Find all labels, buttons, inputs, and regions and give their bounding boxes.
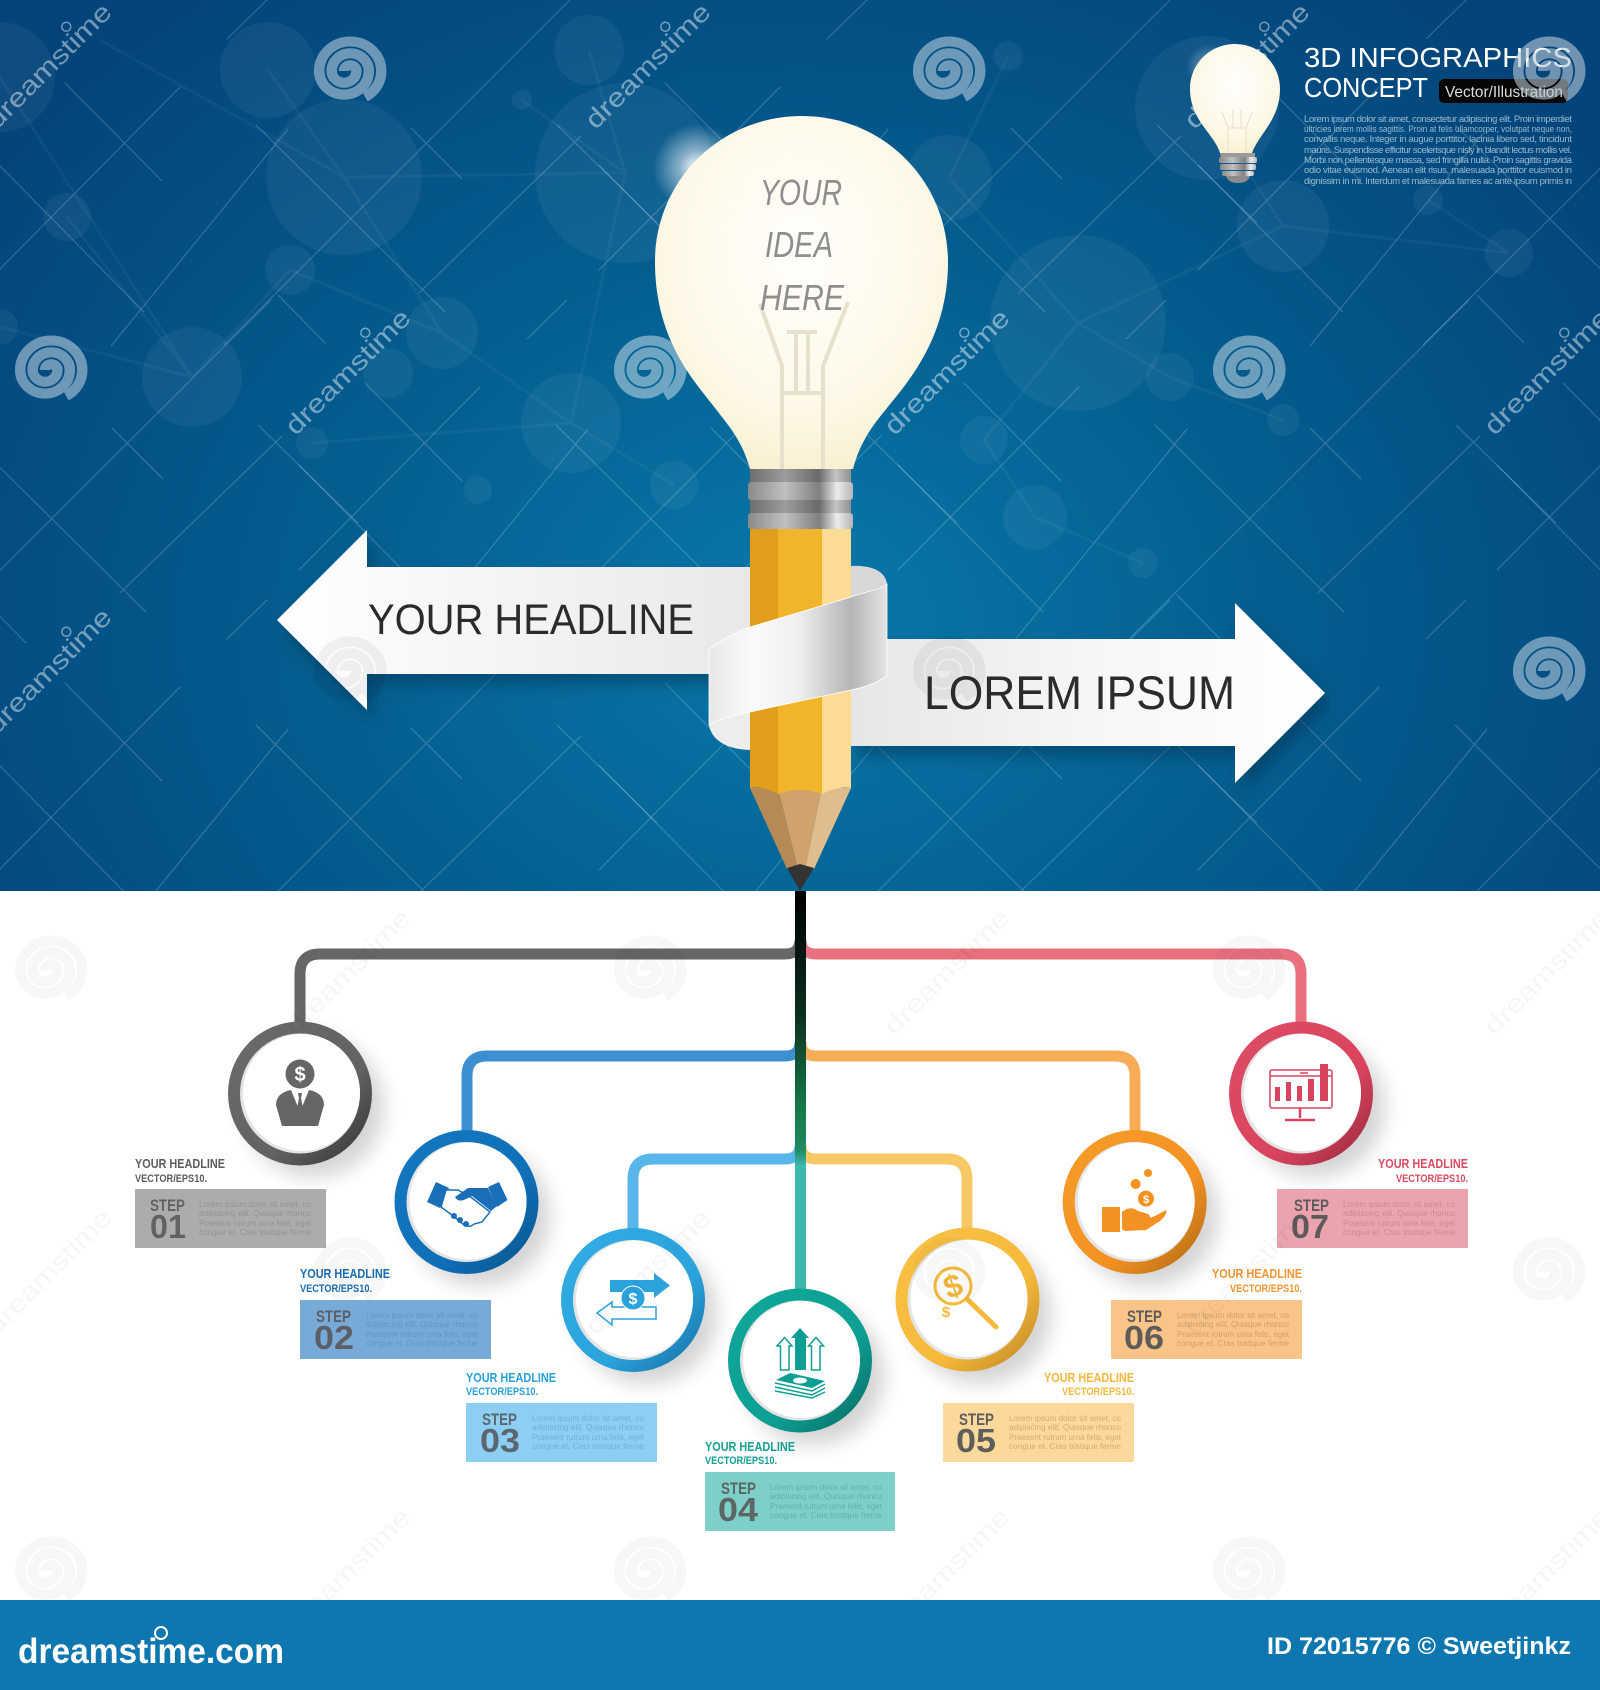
step 3 box: Praesent rutrum urna felis, eget <box>532 1432 645 1442</box>
step 6 box: 06 <box>1124 1319 1164 1356</box>
watermark wordmarks on blue: dreamstime <box>1178 0 1316 135</box>
icon: businessman with dollar head <box>276 1060 324 1126</box>
step 5 box: Praesent rutrum urna felis, eget <box>1009 1432 1122 1442</box>
title body text: Morbi non pellentesque massa, sed fringilla nulla. Proin sagittis gravida <box>1304 155 1573 166</box>
connector step 3 <box>633 1145 800 1240</box>
step 5 box: adipiscing elit. Quisque rhoncu <box>1009 1422 1121 1432</box>
title block <box>1304 42 1573 187</box>
icon: hand with coins <box>1102 1169 1166 1232</box>
faint watermarks on white area: dreamstime <box>579 1203 717 1341</box>
pencil <box>748 469 853 891</box>
faint watermarks on white area <box>0 903 1600 1640</box>
connector step 2 <box>467 1042 800 1140</box>
title body text: convallis neque. Integer in augue porttitor, lacinia libero sed, tincidunt <box>1304 134 1572 145</box>
step 1 headline: VECTOR/EPS10. <box>135 1173 207 1185</box>
step 2 box: Praesent rutrum urna felis, eget <box>366 1329 479 1339</box>
watermark thin lines <box>0 0 1600 946</box>
step 3 label <box>466 1370 657 1462</box>
title body text: mauris. Suspendisse efficitur scelerisque nisly in blandit lectus mollis vel. <box>1304 145 1572 156</box>
step 3 node <box>561 1228 717 1384</box>
footer logo: dreamstime.com <box>18 1632 284 1671</box>
pencil wood tip <box>750 788 851 891</box>
footer credit: ID 72015776 © Sweetjinkz <box>1267 1633 1571 1660</box>
step 3 headline: YOUR HEADLINE <box>466 1370 556 1385</box>
faint watermarks on white area: dreamstime <box>279 1502 417 1640</box>
step 1 label <box>135 1156 326 1248</box>
left arrow <box>277 530 760 710</box>
bulb glass <box>655 116 948 469</box>
faint watermarks on white area: dreamstime <box>1478 903 1600 1041</box>
faint watermarks on white area: dreamstime <box>1178 1203 1316 1341</box>
ribbon back parts <box>709 566 887 750</box>
step 7 box: congue et. Cras tristique ferme <box>1343 1227 1455 1237</box>
step 2 box: Lorem ipsum dolor sit amet, co <box>366 1310 478 1320</box>
step 2 box <box>300 1300 491 1359</box>
icon: hand with coins: $ <box>1143 1194 1149 1206</box>
step 1 box: adipiscing elit. Quisque rhoncu <box>199 1208 311 1218</box>
step 5 headline: VECTOR/EPS10. <box>1062 1386 1134 1398</box>
step 7 box <box>1277 1189 1468 1248</box>
pencil body <box>750 529 851 794</box>
watermark spirals on blue <box>20 42 1580 697</box>
step 6 box: congue et. Cras tristique ferme <box>1177 1338 1289 1348</box>
step 1 box: STEP <box>150 1196 185 1215</box>
watermark wordmarks on blue: dreamstime <box>1478 303 1600 441</box>
title body text: dignissim in mi. Interdum et malesuada fames ac ante ipsum primis in <box>1304 176 1572 187</box>
step 4 headline: YOUR HEADLINE <box>705 1439 795 1454</box>
step 3 box: 03 <box>480 1422 520 1459</box>
title line one: 3D INFOGRAPHICS <box>1304 42 1572 73</box>
vector illustration badge <box>1439 79 1568 103</box>
connector step 5 <box>801 1145 967 1240</box>
step 3 box: STEP <box>482 1410 517 1429</box>
icon: magnifier over dollar: $ <box>942 1304 951 1321</box>
connector step 7 <box>801 940 1301 1035</box>
step 3 box: Lorem ipsum dolor sit amet, co <box>532 1413 644 1423</box>
step 3 box: congue et. Cras tristique ferme <box>532 1441 644 1451</box>
vector illustration badge: Vector/Illustration <box>1445 84 1563 101</box>
right arrow <box>851 603 1325 783</box>
step 6 node <box>1063 1130 1218 1286</box>
step 4 headline: VECTOR/EPS10. <box>705 1455 777 1467</box>
step 4 box: congue et. Cras tristique ferme <box>770 1510 882 1520</box>
network bubbles background <box>0 0 1600 946</box>
icon: growth arrows over cash <box>775 1328 825 1398</box>
icon: businessman with dollar head: $ <box>294 1064 306 1086</box>
step 2 box: 02 <box>314 1319 354 1356</box>
step 6 box: Lorem ipsum dolor sit amet, co <box>1177 1310 1289 1320</box>
step 6 box: adipiscing elit. Quisque rhoncu <box>1177 1319 1289 1329</box>
arrow watermarks <box>319 642 980 697</box>
step 5 box: 05 <box>956 1422 996 1459</box>
footer <box>0 1600 1600 1690</box>
faint watermarks on white area: dreamstime <box>878 903 1016 1041</box>
title body text <box>1304 114 1573 187</box>
step 6 headline: VECTOR/EPS10. <box>1230 1283 1302 1295</box>
blue header background <box>0 0 1600 891</box>
step 7 headline: VECTOR/EPS10. <box>1396 1173 1468 1185</box>
bulb glow <box>653 124 741 212</box>
step 7 box: adipiscing elit. Quisque rhoncu <box>1343 1208 1455 1218</box>
watermark spiral over title <box>1518 42 1580 97</box>
step 7 box: STEP <box>1294 1196 1329 1215</box>
step 1 box: congue et. Cras tristique ferme <box>199 1227 311 1237</box>
faint watermarks on white area: dreamstime <box>1478 1502 1600 1640</box>
step 4 box <box>705 1472 895 1531</box>
step 2 box: adipiscing elit. Quisque rhoncu <box>366 1319 478 1329</box>
watermark wordmarks on blue: dreamstime <box>878 303 1016 441</box>
step 5 label <box>943 1370 1134 1462</box>
step 3 box: adipiscing elit. Quisque rhoncu <box>532 1422 644 1432</box>
connector lines <box>300 891 1301 1295</box>
connector step 6 <box>801 1042 1135 1140</box>
step 4 box: Praesent rutrum urna felis, eget <box>770 1501 883 1511</box>
step 7 node <box>1229 1022 1385 1177</box>
step 2 label <box>300 1266 491 1359</box>
step 1 headline <box>135 1156 225 1185</box>
step 1 box: 01 <box>150 1208 186 1245</box>
step 4 box: 04 <box>718 1491 759 1528</box>
bulb caption: YOUR <box>760 172 842 213</box>
step 5 box: congue et. Cras tristique ferme <box>1009 1441 1121 1451</box>
step 1 box <box>135 1189 326 1248</box>
pencil ferrule <box>748 469 853 529</box>
bulb caption: HERE <box>760 277 845 318</box>
step 6 headline <box>1212 1266 1302 1295</box>
step 4 headline <box>705 1439 795 1467</box>
central stem <box>795 891 806 1295</box>
title line two: CONCEPT <box>1304 72 1428 103</box>
step 1 headline: YOUR HEADLINE <box>135 1156 225 1171</box>
filament <box>760 302 848 469</box>
ribbon front <box>709 584 887 725</box>
step 4 node <box>728 1288 884 1445</box>
step 2 headline: VECTOR/EPS10. <box>300 1283 372 1295</box>
step 1 box: Praesent rutrum urna felis, eget <box>199 1218 312 1228</box>
bulb caption <box>760 172 845 318</box>
icon: magnifier over dollar: $ <box>938 1266 968 1306</box>
step 2 headline: YOUR HEADLINE <box>300 1266 390 1281</box>
step 5 headline <box>1044 1370 1134 1398</box>
title body text: Lorem ipsum dolor sit amet, consectetur adipiscing elit. Proin imperdiet <box>1304 114 1572 125</box>
left arrow text: YOUR HEADLINE <box>368 596 694 644</box>
faint watermarks on white area: dreamstime <box>878 1502 1016 1640</box>
icon: money exchange arrows <box>597 1273 670 1325</box>
step 4 box: Lorem ipsum dolor sit amet, co <box>770 1482 882 1492</box>
step 6 box: Praesent rutrum urna felis, eget <box>1177 1329 1290 1339</box>
icon: magnifier over dollar <box>935 1266 996 1327</box>
watermark wordmarks on blue: dreamstime <box>279 303 417 441</box>
step 3 headline <box>466 1370 556 1398</box>
step 5 node <box>896 1228 1051 1384</box>
step 7 headline <box>1378 1156 1468 1185</box>
step 7 headline: YOUR HEADLINE <box>1378 1156 1468 1171</box>
step 5 box: STEP <box>959 1410 994 1429</box>
step 1 node <box>228 1022 384 1177</box>
step 7 box: Lorem ipsum dolor sit amet, co <box>1343 1199 1455 1209</box>
icon: money exchange arrows: $ <box>629 1291 638 1308</box>
step 6 box <box>1111 1300 1302 1359</box>
title body text: odio vitae euismod. Aenean elit risus, malesuada porttitor euismod in <box>1304 165 1572 176</box>
watermark wordmarks on blue <box>0 0 1600 740</box>
step 3 box <box>466 1403 657 1462</box>
bulb caption: IDEA <box>765 224 833 265</box>
main bulb <box>653 116 948 469</box>
step 1 box: Lorem ipsum dolor sit amet, co <box>199 1199 311 1209</box>
step 2 headline <box>300 1266 390 1295</box>
right arrow text: LOREM IPSUM <box>924 666 1235 719</box>
step 5 headline: YOUR HEADLINE <box>1044 1370 1134 1385</box>
step 5 box: Lorem ipsum dolor sit amet, co <box>1009 1413 1121 1423</box>
step 6 box: STEP <box>1127 1307 1162 1326</box>
step 4 box: STEP <box>721 1479 756 1498</box>
step 7 box: 07 <box>1291 1208 1329 1245</box>
step 4 box: adipiscing elit. Quisque rhoncu <box>770 1491 882 1501</box>
icon: handshake <box>427 1182 508 1227</box>
step 2 box: congue et. Cras tristique ferme <box>366 1338 478 1348</box>
white lower background <box>0 891 1600 1600</box>
faint watermarks on white area: dreamstime <box>279 903 417 1041</box>
step 6 label <box>1111 1266 1302 1359</box>
icon: monitor with bar chart <box>1270 1064 1332 1120</box>
step 7 box: Praesent rutrum urna felis, eget <box>1343 1218 1456 1228</box>
step 2 box: STEP <box>316 1307 351 1326</box>
connector step 1 <box>300 940 800 1035</box>
step 3 headline: VECTOR/EPS10. <box>466 1386 538 1398</box>
step 6 headline: YOUR HEADLINE <box>1212 1266 1302 1281</box>
small bulb icon <box>1186 44 1280 183</box>
step 7 label <box>1277 1156 1468 1248</box>
step 2 node <box>394 1130 550 1286</box>
step 4 label <box>705 1439 895 1531</box>
watermark wordmarks on blue: dreamstime <box>579 0 717 135</box>
step 5 box <box>943 1403 1134 1462</box>
